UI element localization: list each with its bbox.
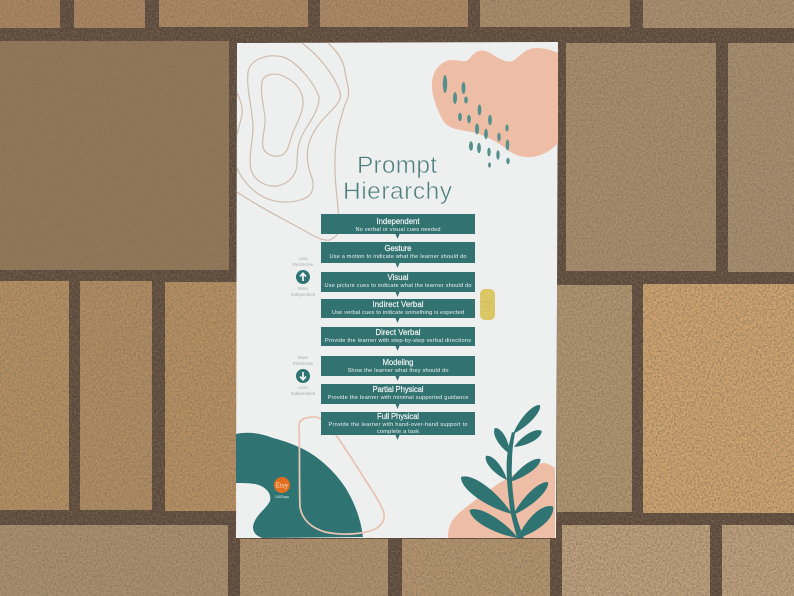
side note: more restrictive: Restrictive [293, 361, 314, 366]
pink outline shape [299, 417, 384, 534]
side note: more restrictive: Independent [291, 391, 316, 396]
level: Visual: Visual [388, 273, 409, 282]
level: Visual: Use picture cues to indicate what the learner should do [324, 283, 472, 289]
level: Independent [321, 214, 475, 239]
title: Hierarchy [343, 178, 453, 205]
level: Gesture: Gesture [384, 244, 412, 253]
logo: Etsy badge: Etsy [276, 482, 289, 490]
level: Indirect Verbal: Use verbal cues to indicate something is expected [332, 310, 464, 316]
side note: less restrictive: Restrictive [293, 262, 314, 267]
level: Partial Physical: Partial Physical [372, 385, 424, 394]
side note: more restrictive: More [298, 355, 309, 360]
yellow sticky tab: level [484, 304, 491, 308]
side note: less restrictive [291, 256, 316, 297]
yellow sticky tab [480, 289, 495, 320]
side note: more restrictive [291, 355, 316, 396]
side note: less restrictive: More [298, 286, 309, 291]
logo: Etsy badge: 180Days [275, 495, 289, 499]
side note: less restrictive: Independent [291, 292, 316, 297]
level: Full Physical: complete a task [377, 429, 419, 435]
panel: poster sheet [236, 42, 558, 538]
level: Partial Physical [321, 384, 475, 409]
level: Full Physical: Provide the learner with hand-over-hand support to [328, 422, 468, 428]
level: Gesture [321, 242, 475, 268]
level: Indirect Verbal [321, 299, 475, 323]
yellow sticky tab: Prompt [483, 300, 492, 304]
logo: Etsy badge [274, 477, 290, 499]
level: Full Physical: Full Physical [377, 412, 419, 421]
pink blob top right [432, 48, 558, 157]
teal blob bottom left [236, 433, 363, 538]
level: Modeling: Modeling [382, 358, 414, 367]
prompt levels [321, 214, 475, 440]
side note: more restrictive: Less [298, 385, 308, 390]
title: Prompt [357, 152, 437, 179]
level: Direct Verbal: Provide the learner with step-by-step verbal directions [325, 338, 471, 344]
contour lines decoration [237, 43, 349, 240]
raindrop dashes [443, 75, 510, 168]
level: Partial Physical: Provide the learner with minimal supported guidance [328, 395, 468, 401]
level: Gesture: Use a motion to indicate what the learner should do [330, 254, 466, 260]
level: Indirect Verbal: Indirect Verbal [372, 300, 424, 309]
level: Direct Verbal [321, 327, 475, 351]
side note: less restrictive: Less [298, 256, 308, 261]
level: Modeling: Show the learner what they should do [348, 368, 448, 374]
level: Visual [321, 272, 475, 297]
pink blob bottom right [448, 463, 555, 538]
level: Independent: No verbal or visual cues needed [356, 227, 440, 233]
level: Modeling [321, 356, 475, 381]
level: Direct Verbal: Direct Verbal [376, 328, 421, 337]
icon: plant [457, 402, 558, 544]
title [343, 152, 453, 205]
level: Independent: Independent [376, 217, 420, 226]
level: Full Physical [321, 412, 475, 440]
